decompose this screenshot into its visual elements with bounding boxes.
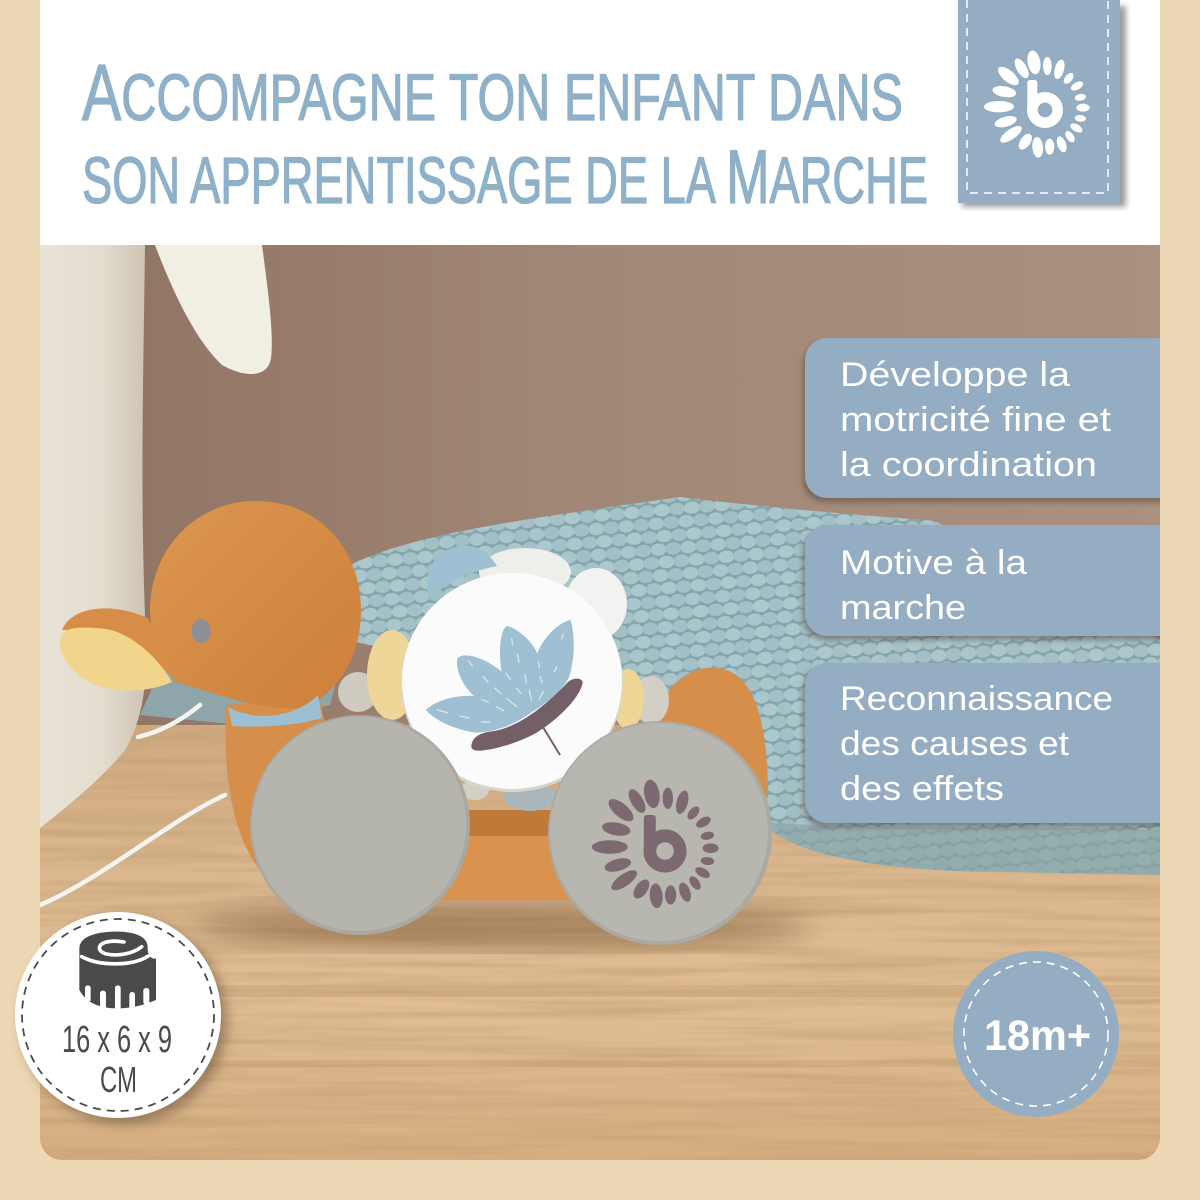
dimensions text: 16 x 6 x 9 xyxy=(62,1019,172,1061)
toy cast shadow xyxy=(190,901,810,949)
benefit panel: motricité xyxy=(805,338,1160,498)
benefit panel: causes et effets: des causes et xyxy=(840,725,1070,763)
dimensions text: CM xyxy=(100,1059,137,1100)
small yellow cymbal right xyxy=(616,669,644,728)
age badge 18m+: 18m+ xyxy=(984,1012,1091,1060)
duck beak xyxy=(60,608,176,691)
duck tail and base xyxy=(226,668,768,870)
right grey wheel with logo xyxy=(548,721,772,945)
lower grey cymbal xyxy=(504,786,555,811)
blue cymbal xyxy=(427,546,497,600)
benefit panel: motricité: Développe la xyxy=(840,356,1070,394)
base upper rim xyxy=(469,810,550,836)
age badge 18m+ xyxy=(953,951,1119,1117)
flower drawing xyxy=(426,620,583,755)
benefit panel: causes et effets: des effets xyxy=(840,770,1004,808)
dimensions text xyxy=(62,1019,172,1100)
tambourine ears xyxy=(338,546,669,811)
title xyxy=(82,48,928,220)
benefit panel: causes et effets: Reconnaissance xyxy=(840,680,1113,718)
knitted blue blanket xyxy=(140,497,1160,875)
panel shadows xyxy=(803,342,1200,827)
duck head xyxy=(150,501,361,708)
wheel logo xyxy=(592,778,719,909)
title line 2: SON APPRENTISSAGE DE LA MARCHE xyxy=(82,135,928,220)
canvas bag xyxy=(40,245,146,828)
photo: wooden duck pull toy scene xyxy=(40,245,1160,1160)
brand tag with logo xyxy=(958,0,1126,207)
benefit panel: marche xyxy=(805,525,1160,636)
brand logo xyxy=(984,49,1090,158)
white bunny ear xyxy=(155,245,272,374)
lower white cymbal xyxy=(462,782,489,800)
benefit panel: marche: Motive à la xyxy=(840,544,1027,582)
base lower wood xyxy=(440,898,468,900)
title line 1: ACCOMPAGNE TON ENFANT DANS xyxy=(82,48,903,137)
benefit panel: causes et effets xyxy=(805,663,1160,823)
duck toy xyxy=(60,501,768,900)
white cymbal right xyxy=(568,568,627,635)
grey back disc right xyxy=(640,676,669,722)
grey back disc xyxy=(338,672,374,712)
benefit panel: marche: marche xyxy=(840,589,966,627)
wooden table xyxy=(40,725,1160,1160)
dimensions badge xyxy=(15,912,227,1124)
benefit panel: motricité: motricité fine et xyxy=(840,401,1112,439)
blue collar xyxy=(228,695,322,727)
white tambourine disc with flower xyxy=(401,573,623,792)
duck eye xyxy=(192,619,210,643)
benefit panel: motricité: la coordination xyxy=(840,446,1097,484)
white pull cords xyxy=(40,705,225,905)
left grey wheel xyxy=(250,715,470,935)
white back cymbal xyxy=(479,548,571,586)
white header band xyxy=(40,0,1160,245)
small yellow cymbal left xyxy=(367,630,409,720)
icon: measuring tape xyxy=(79,932,156,1011)
wall xyxy=(136,245,1160,725)
